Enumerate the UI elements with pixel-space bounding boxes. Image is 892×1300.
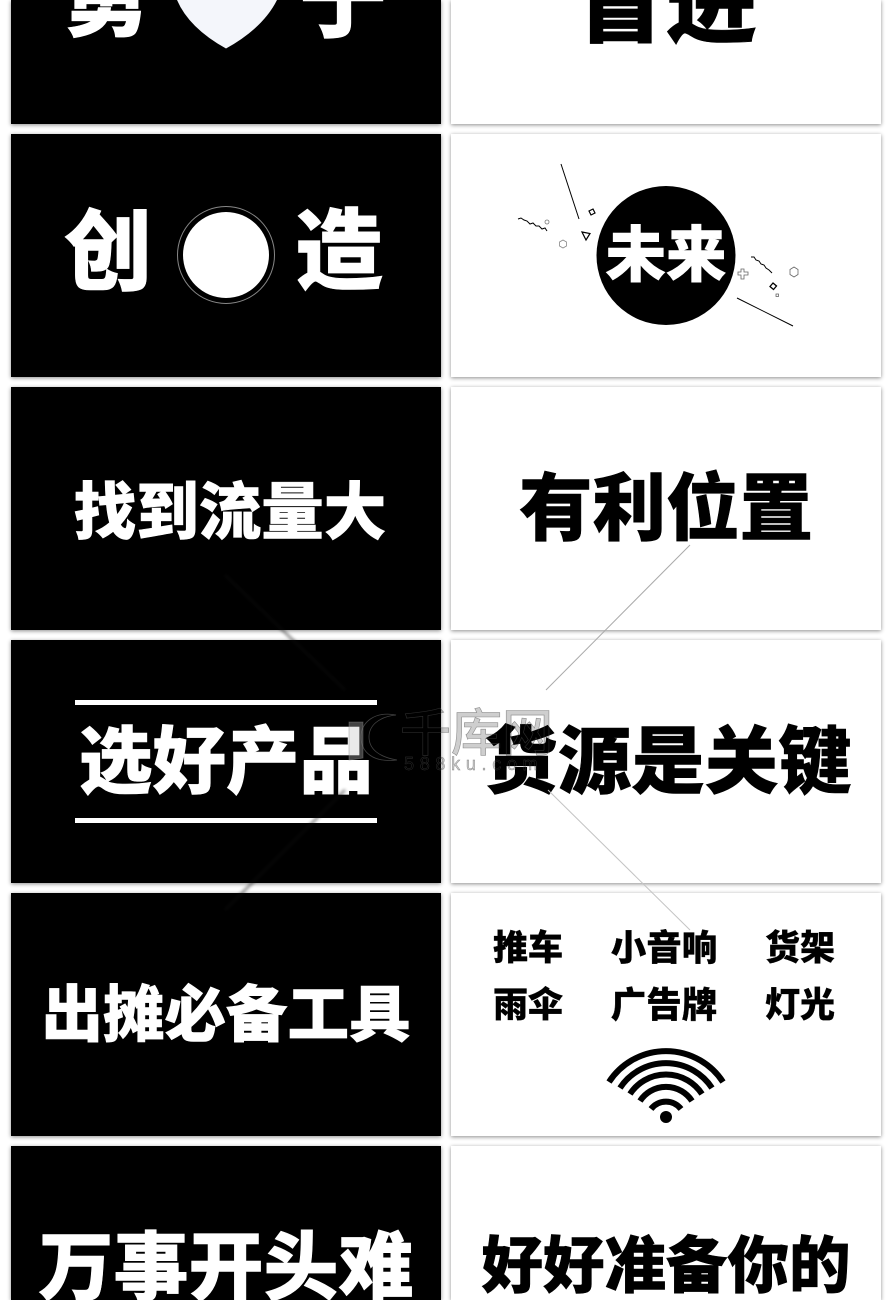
heading: 出摊必备工具 — [41, 981, 410, 1050]
tool: 推车: 推车 — [493, 929, 563, 968]
panel: choose products — [11, 640, 441, 883]
heading: 选好产品 — [79, 720, 373, 803]
heading: 造: 造 — [295, 202, 383, 301]
tool: 雨伞: 雨伞 — [493, 986, 563, 1025]
bottom rule — [75, 818, 377, 823]
tool: 小音响: 小音响 — [611, 928, 717, 968]
tool: 灯光: 灯光 — [765, 986, 835, 1025]
heading: 未来: 未来 — [606, 221, 726, 289]
icon: heart — [177, 0, 277, 48]
illustration: circle and geometric confetti — [518, 164, 798, 326]
heading: 好好准备你的 — [481, 1232, 850, 1300]
panel: hard beginnings — [11, 1146, 441, 1300]
icon: ringed circle — [177, 206, 275, 304]
heading: 找到流量大 — [74, 478, 386, 548]
heading: 有利位置 — [519, 467, 813, 550]
heading: 货源是关键 — [484, 720, 852, 803]
tool: 货架: 货架 — [765, 929, 835, 968]
panel: prepare — [451, 1146, 881, 1300]
heading: 创: 创 — [64, 203, 152, 302]
panel: supply is key — [451, 640, 881, 883]
panel: venture (cropped) — [451, 0, 881, 124]
top rule — [75, 700, 377, 705]
panel: brave (cropped) — [11, 0, 441, 124]
panel: create — [11, 134, 441, 377]
panel: stall tools — [11, 893, 441, 1136]
tool: 广告牌: 广告牌 — [611, 985, 717, 1025]
panel: tool list — [451, 893, 881, 1136]
panel: good position — [451, 387, 881, 630]
icon: wifi signal — [606, 1048, 726, 1123]
panel: future — [451, 134, 881, 377]
panel: find traffic — [11, 387, 441, 630]
